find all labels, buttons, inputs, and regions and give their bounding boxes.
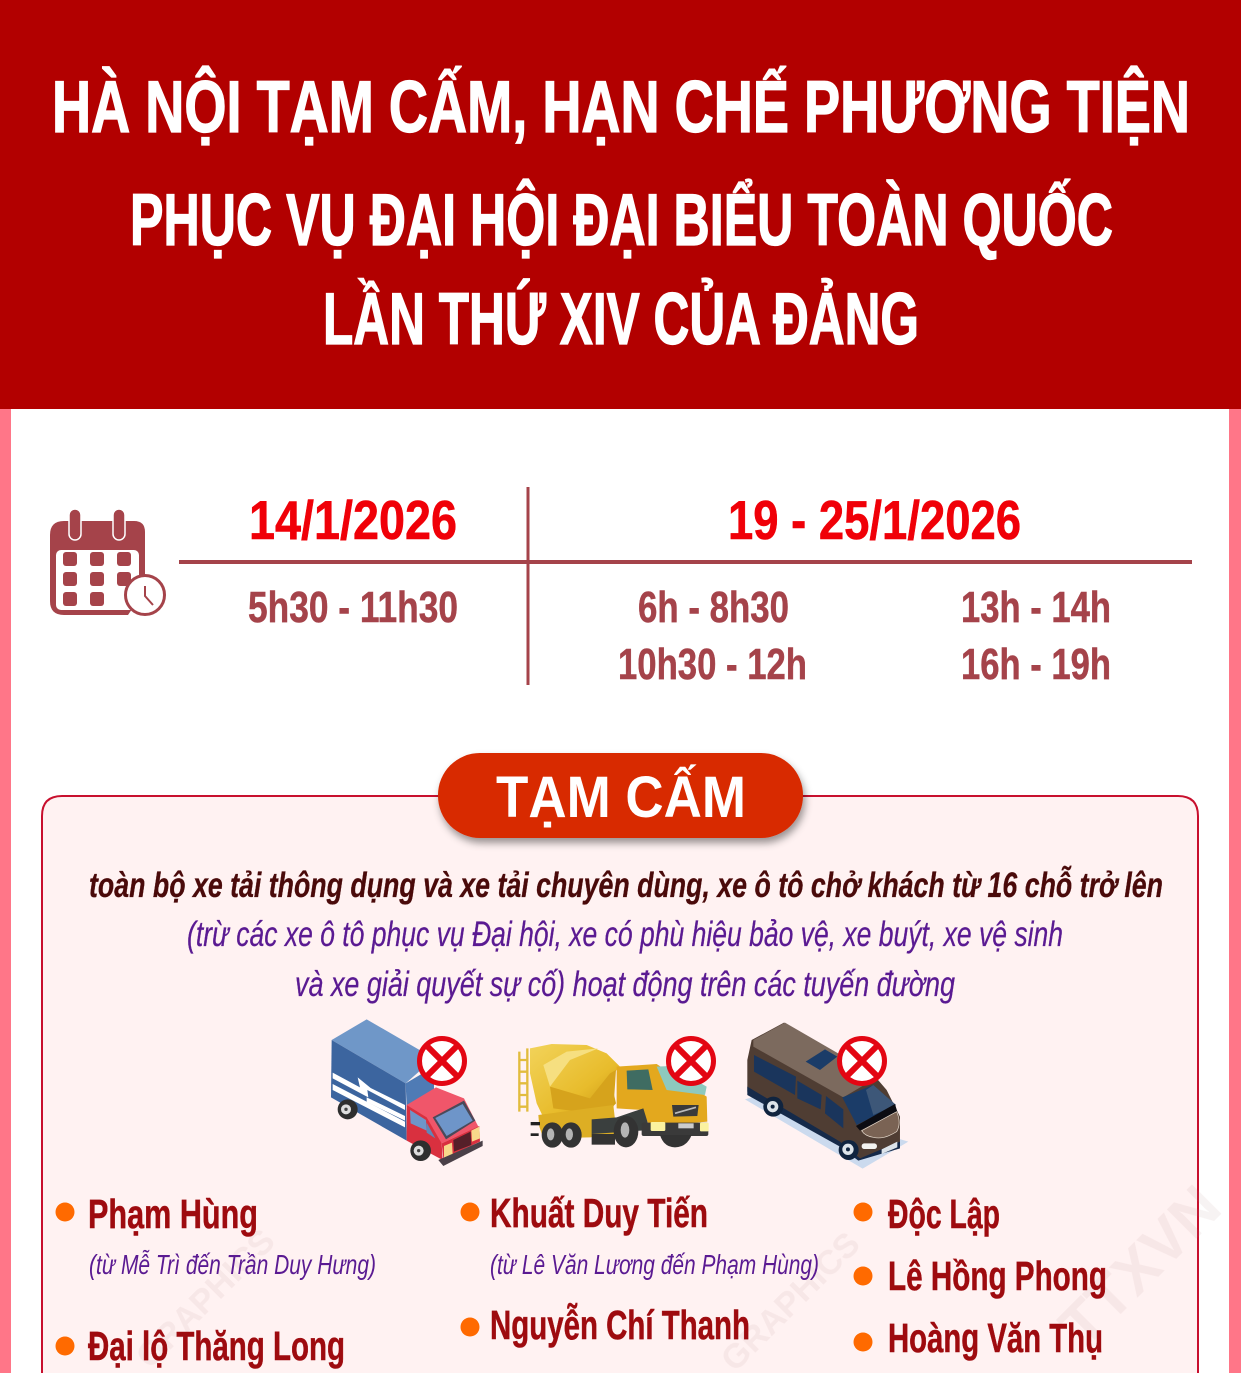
time slots: 13h - 14h — [961, 583, 1111, 632]
description: và xe giải quyết sự cố) hoạt động trên các tuyến đường — [295, 965, 955, 1004]
title: LẦN THỨ XIV CỦA ĐẢNG — [323, 279, 919, 360]
date: 19 - 25/1/2026: 19 - 25/1/2026 — [728, 489, 1021, 551]
icon: truck — [331, 1019, 483, 1166]
title — [52, 67, 1190, 360]
icon: prohibited signs — [420, 1038, 884, 1084]
road names: Nguyễn Chí Thanh — [490, 1302, 750, 1348]
road names: Phạm Hùng — [88, 1191, 258, 1237]
road list — [56, 1190, 1107, 1369]
heading pill — [438, 753, 803, 838]
road names — [88, 1190, 1107, 1369]
heading pill: TẠM CẤM — [496, 765, 746, 830]
time slots: 16h - 19h — [961, 640, 1111, 689]
header band — [0, 0, 1241, 409]
panel: tạm cấm — [42, 753, 1233, 1373]
time slots — [248, 583, 1111, 689]
road names: Khuất Duy Tiến — [490, 1190, 708, 1236]
road names: Hoàng Văn Thụ — [888, 1315, 1103, 1361]
date: 14/1/2026: 14/1/2026 — [249, 489, 457, 551]
road notes — [89, 1249, 819, 1280]
bullets — [56, 1202, 872, 1356]
watermark — [129, 1173, 1233, 1373]
schedule table — [179, 487, 1192, 689]
side strip: left — [0, 409, 11, 1373]
watermark: GRAPHICS — [129, 1222, 283, 1373]
watermark: TTXVN — [1047, 1173, 1233, 1359]
side strip: right — [1229, 409, 1241, 1373]
icon: calendar with clock — [50, 509, 164, 615]
icon: passenger van — [745, 1023, 908, 1169]
road notes: (từ Mễ Trì đến Trần Duy Hưng) — [89, 1249, 376, 1280]
description — [89, 865, 1163, 1004]
time slots: 6h - 8h30 — [638, 583, 789, 632]
road notes: (từ Lê Văn Lương đến Phạm Hùng) — [490, 1249, 819, 1280]
road names: Đại lộ Thăng Long — [88, 1323, 345, 1369]
time slots: 10h30 - 12h — [618, 640, 807, 689]
road names: Độc Lập — [888, 1191, 1000, 1237]
road names: Lê Hồng Phong — [888, 1253, 1107, 1299]
time slots: 5h30 - 11h30 — [248, 583, 458, 632]
icon: cement mixer truck — [519, 1044, 709, 1148]
